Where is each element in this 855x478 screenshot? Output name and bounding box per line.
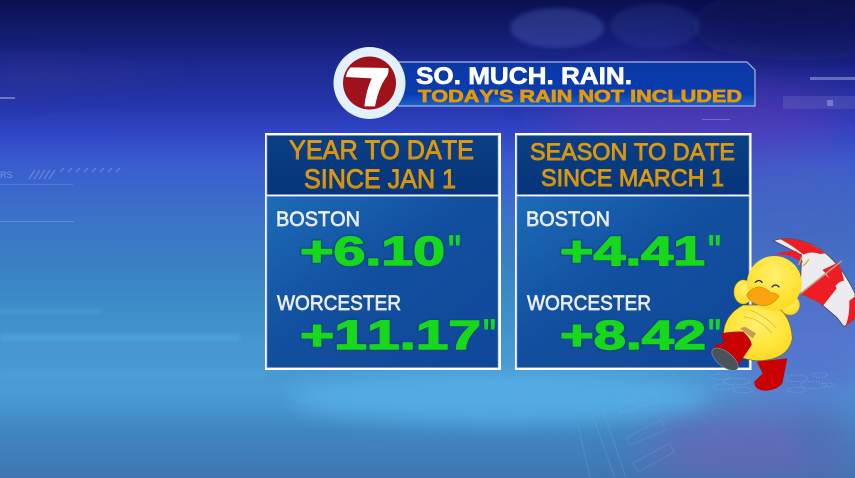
value: boston season to date: +4.41 [560,228,705,274]
raised boot [712,332,752,368]
heading: year to date: YEAR TO DATE [289,135,474,165]
umbrella [773,239,855,327]
banner heading: SO. MUCH. RAIN. [416,63,632,90]
icon: duck with umbrella [708,239,855,393]
background: RS [0,170,13,180]
value: worcester season to date: +8.42 [560,312,706,358]
value: boston year to date: +6.10 [300,228,445,274]
heading: season to date: SEASON TO DATE [530,139,735,166]
value: worcester year to date [300,310,497,358]
label: worcester: WORCESTER [277,292,401,315]
splash [711,373,835,393]
arm [740,327,756,338]
panel: year to date [265,133,501,370]
crest [799,257,809,266]
head [734,256,802,315]
value: boston year to date: +6.10 [300,228,445,274]
value: worcester year to date: +11.17 [300,312,481,358]
subheading: since jan 1: SINCE JAN 1 [304,164,456,194]
beak [747,287,779,306]
value: boston season to date: " [707,226,722,273]
label: boston: BOSTON [526,208,610,231]
value: worcester year to date: +11.17 [300,312,481,358]
value: boston year to date [300,226,462,274]
standing boot [754,358,787,391]
value: worcester season to date: " [707,310,722,357]
value: boston season to date [560,226,722,274]
panel: season to date [515,133,752,370]
title banner [398,62,755,106]
value: boston season to date: +4.41 [560,228,705,274]
label: boston: BOSTON [276,208,360,231]
eyes [755,280,779,287]
label: worcester: WORCESTER [527,292,651,315]
body [723,305,792,361]
boot sole [708,344,742,375]
value: boston year to date: " [447,226,462,273]
value: worcester season to date [560,310,722,358]
value: worcester year to date: " [482,310,497,357]
banner subheading: TODAY'S RAIN NOT INCLUDED [418,86,742,106]
icon: channel 7 logo [334,47,406,119]
subheading: since march 1: SINCE MARCH 1 [541,165,724,192]
value: worcester season to date: +8.42 [560,312,706,358]
